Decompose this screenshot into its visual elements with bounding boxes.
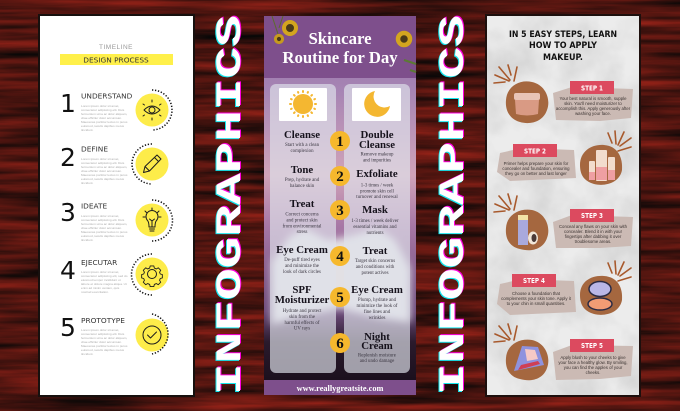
step 3: ideate: fermentum urna ac dolor aliquam,: [81, 222, 127, 226]
step 3: ideate: Lorem ipsum dolor sit amet,: [81, 214, 119, 218]
day routine text: Hydrate and protect: [283, 309, 322, 314]
day routine text: and minimize the: [285, 264, 319, 269]
icon: cream jar: [514, 93, 540, 116]
icon: gear: [142, 266, 162, 287]
step 5: prototype: Lorem ipsum dolor sit amet,: [81, 328, 119, 332]
step 1: [494, 65, 633, 123]
numbered badges: 3: [336, 203, 344, 219]
step 4: ejecutar: consectetur adipiscing elit, sed do: [81, 274, 128, 278]
step 2: define: fermentum urna ac dolor aliquam,: [81, 165, 127, 169]
mountain backdrop: [272, 228, 410, 324]
step 1: understand: Maecenas porttitor lectus in purus: [81, 120, 128, 124]
vertical title: infographics right: INFOGRAPHICS: [433, 16, 473, 396]
heading: design process: DESIGN PROCESS: [83, 56, 149, 64]
step 4: ejecutar: Lorem ipsum dolor sit amet,: [81, 270, 119, 274]
step 3: ideate: Maecenas porttitor lectus in purus: [81, 230, 128, 234]
step 2: concealer and foundation, ensuring: [502, 166, 570, 171]
step 2: define: Maecenas porttitor lectus in purus: [81, 173, 128, 177]
step 5: your face a healthy glow. By smiling,: [558, 360, 628, 365]
card: night column: [344, 84, 410, 373]
step 5: prototype: PROTOTYPE: [81, 316, 125, 325]
night routine text: Eye Cream: [351, 284, 403, 296]
day routine text: Prep, hydrate and: [285, 178, 320, 183]
step 3: ideate: 3: [60, 198, 76, 227]
day routine text: Start with a clean: [285, 143, 320, 148]
step 4: ejecutar: eiusmod tempor incididunt ut: [81, 278, 121, 282]
icon: cosmetic tubes: [589, 150, 615, 181]
step 5: you can find the apples of your: [564, 365, 623, 370]
step 4: [497, 261, 631, 315]
step 3: ideate: [60, 198, 172, 242]
icon: concealer: [518, 215, 538, 245]
step 2: define: DEFINE: [81, 144, 108, 154]
night routine text: potent actives: [361, 271, 389, 276]
footer: website: www.reallygreatsite.com: [297, 384, 383, 393]
step 4: ejecutar: enim ad minim veniam, quis: [81, 286, 120, 290]
step 4: ejecutar: EJECUTAR: [81, 258, 117, 267]
panel: design process timeline: [38, 14, 195, 397]
step 3: ideate: tincidunt.: [81, 238, 94, 242]
step 4: ejecutar: labore et dolore magna aliqua. Ut: [81, 282, 127, 286]
day routine text: stress: [297, 230, 308, 235]
step 4: ejecutar: nostrud exercitation.: [81, 290, 109, 294]
night routine text: essential vitamins and: [353, 225, 397, 230]
heading: design process: [60, 54, 173, 65]
step 3: ideate: euismod, iaculis dapibus metus: [81, 234, 124, 238]
step 5: [494, 324, 633, 380]
night routine text: minimize the look of: [357, 304, 398, 309]
day routine text: complexion: [290, 149, 314, 154]
step 3: concealer. Blend it in with your: [564, 229, 623, 234]
heading: skincare routine for day: Skincare: [308, 29, 372, 48]
icon: compact: [588, 282, 612, 310]
night routine text: Cleanse: [359, 139, 395, 151]
step 5: STEP 5: [581, 342, 603, 350]
vertical title: infographics right: [433, 14, 475, 396]
night routine text: Double: [360, 129, 394, 141]
day routine text: Eye Cream: [276, 244, 328, 256]
night routine text: Remove makeup: [360, 152, 394, 158]
step 2: define: 2: [60, 143, 76, 172]
icon: check mark: [143, 326, 161, 344]
step 5: prototype: [60, 313, 168, 356]
night routine text: and conditions with: [356, 265, 395, 270]
vertical title: infographics right: INFOGRAPHICS: [434, 15, 474, 395]
step 2: define: tincidunt.: [81, 181, 94, 185]
night routine text: Exfoliate: [356, 168, 398, 180]
icon: flowers top right: [398, 33, 416, 72]
day routine text: skin from the: [289, 315, 315, 320]
step 1: understand: UNDERSTAND: [81, 92, 133, 100]
step 3: ideate: IDEATE: [81, 202, 108, 210]
numbered badges: 2: [336, 169, 344, 185]
night routine text: [351, 129, 403, 364]
step 4: complements your skin tone. Apply it: [501, 296, 572, 301]
icon: eye: [143, 100, 161, 120]
panel: skincare routine: [264, 16, 416, 395]
step 5: prototype: 5: [60, 313, 76, 342]
numbered badges: 1: [336, 134, 344, 150]
header band: [264, 16, 416, 78]
icon: moon: [352, 88, 401, 121]
day routine text: Cleanse: [284, 129, 320, 141]
night routine text: promote skin cell: [360, 190, 395, 194]
vertical title: infographics right: INFOGRAPHICS: [435, 14, 475, 394]
step 4: ejecutar: 4: [60, 256, 76, 285]
numbered badges: [330, 131, 350, 353]
step 2: [497, 131, 631, 185]
day routine text: Treat: [290, 198, 315, 210]
step 3: STEP 3: [581, 212, 603, 220]
vertical title: infographics left: INFOGRAPHICS: [211, 15, 251, 395]
footer: website: [264, 380, 416, 395]
vertical title: infographics left: INFOGRAPHICS: [210, 16, 250, 396]
step 1: washing your face.: [575, 111, 611, 116]
step 1: understand: [60, 89, 172, 132]
night routine text: and undo damage: [360, 359, 394, 364]
day routine text: UV rays: [294, 326, 310, 332]
night routine text: wrinkles: [369, 316, 386, 321]
step 1: skin. You'll need moisturizer to: [564, 101, 622, 106]
step 2: Primer helps prepare your skin for: [504, 161, 569, 166]
heading: makeup steps: HOW TO APPLY: [529, 41, 598, 51]
step 1: understand: 1: [60, 89, 76, 118]
icon: blush palette: [514, 346, 544, 371]
step 4: to your chin in small quantities.: [507, 301, 565, 306]
step 3: [494, 194, 633, 250]
icon: pencil: [144, 155, 161, 172]
day routine text: SPF: [292, 284, 312, 296]
night routine text: Mask: [362, 204, 388, 216]
day routine text: Moisturizer: [275, 294, 329, 306]
vertical title: infographics left: [210, 14, 252, 396]
night routine text: Night: [364, 331, 390, 343]
step 3: troublesome areas.: [575, 239, 611, 244]
night routine text: nutrients: [366, 231, 384, 236]
step 2: they go on better and last longer: [505, 171, 567, 176]
step 1: understand: euismod, iaculis dapibus metus: [81, 124, 124, 128]
numbered badges: 6: [336, 336, 344, 352]
step 4: Choose a foundation that: [512, 291, 561, 296]
step 1: understand: Lorem ipsum dolor sit amet,: [81, 104, 119, 108]
day routine text: balance skin: [290, 184, 315, 189]
night routine text: Replenish moisture: [358, 354, 396, 358]
step 4: STEP 4: [523, 277, 545, 285]
step 5: prototype: consectetur adipiscing elit. Duis: [81, 332, 125, 336]
step 2: define: [60, 143, 168, 185]
day routine text: from environmental: [283, 224, 322, 230]
step 5: prototype: euismod, iaculis dapibus metus: [81, 348, 124, 352]
day routine text: [275, 129, 329, 332]
heading: skincare routine for day: Routine for Day: [282, 48, 398, 67]
night routine text: turnover and renewal: [356, 195, 398, 200]
vertical title: infographics left: INFOGRAPHICS: [212, 14, 252, 394]
night routine text: 1-3 times / week deliver: [351, 219, 399, 224]
step 1: understand: tincidunt.: [81, 128, 94, 132]
day routine text: De-puff tired eyes: [284, 258, 320, 263]
step 2: define: Lorem ipsum dolor sit amet,: [81, 157, 119, 161]
icon: sun: [279, 88, 327, 121]
step 1: STEP 1: [581, 84, 603, 92]
step 4: ejecutar: [60, 254, 168, 295]
heading: makeup steps: IN 5 EASY STEPS, LEARN: [509, 30, 617, 40]
night routine text: 1-3 times / week: [361, 184, 394, 188]
step 1: Your best natural is smooth, supple: [560, 96, 627, 101]
step 3: ideate: consectetur adipiscing elit. Duis: [81, 218, 125, 222]
step 5: prototype: vitae efficitur dolor accumsan.: [81, 340, 122, 344]
step 3: fingertips after dabbing it over: [565, 234, 622, 239]
day routine text: and protect skin: [286, 218, 318, 224]
night routine text: Plump, hydrate and: [358, 298, 397, 303]
step 3: ideate: vitae efficitur dolor accumsan.: [81, 226, 122, 230]
step 1: understand: vitae efficitur dolor accumsan.: [81, 116, 122, 120]
step 3: Conceal any flaws on your skin with: [559, 224, 628, 229]
step 2: define: euismod, iaculis dapibus metus: [81, 177, 124, 181]
day routine text: harmful effects of: [285, 321, 320, 326]
icon: flowers top left: [272, 16, 296, 43]
night routine text: Treat: [363, 245, 388, 257]
step 5: Apply blush to your cheeks to give: [560, 355, 626, 360]
step 1: understand: fermentum urna ac dolor aliquam,: [81, 112, 127, 116]
step 2: STEP 2: [524, 148, 546, 156]
day routine text: Tone: [291, 164, 313, 176]
step 5: prototype: fermentum urna ac dolor aliquam,: [81, 336, 127, 340]
night routine text: Cream: [361, 340, 393, 352]
day routine text: look of dark circles: [283, 270, 321, 275]
step 5: cheeks.: [586, 370, 600, 375]
night routine text: Target skin concerns: [355, 259, 395, 264]
step 5: prototype: Maecenas porttitor lectus in purus: [81, 344, 128, 348]
step 5: prototype: tincidunt.: [81, 352, 94, 356]
subtitle: timeline: TIMELINE: [99, 44, 133, 51]
panel: makeup steps: [485, 14, 641, 397]
icon: light bulb: [143, 208, 161, 231]
card: day column: [270, 84, 336, 373]
step 2: define: consectetur adipiscing elit. Duis: [81, 161, 125, 165]
numbered badges: 4: [336, 249, 344, 265]
numbered badges: 5: [336, 290, 344, 306]
night routine text: fine lines and: [364, 310, 391, 315]
day routine text: Correct concerns: [285, 212, 319, 218]
heading: makeup steps: MAKEUP.: [543, 53, 583, 63]
step 1: understand: consectetur adipiscing elit. Duis: [81, 108, 125, 112]
step 1: accomplish this. Apply generously after: [556, 106, 631, 111]
night routine text: and impurities: [363, 158, 391, 164]
step 2: define: vitae efficitur dolor accumsan.: [81, 169, 122, 173]
